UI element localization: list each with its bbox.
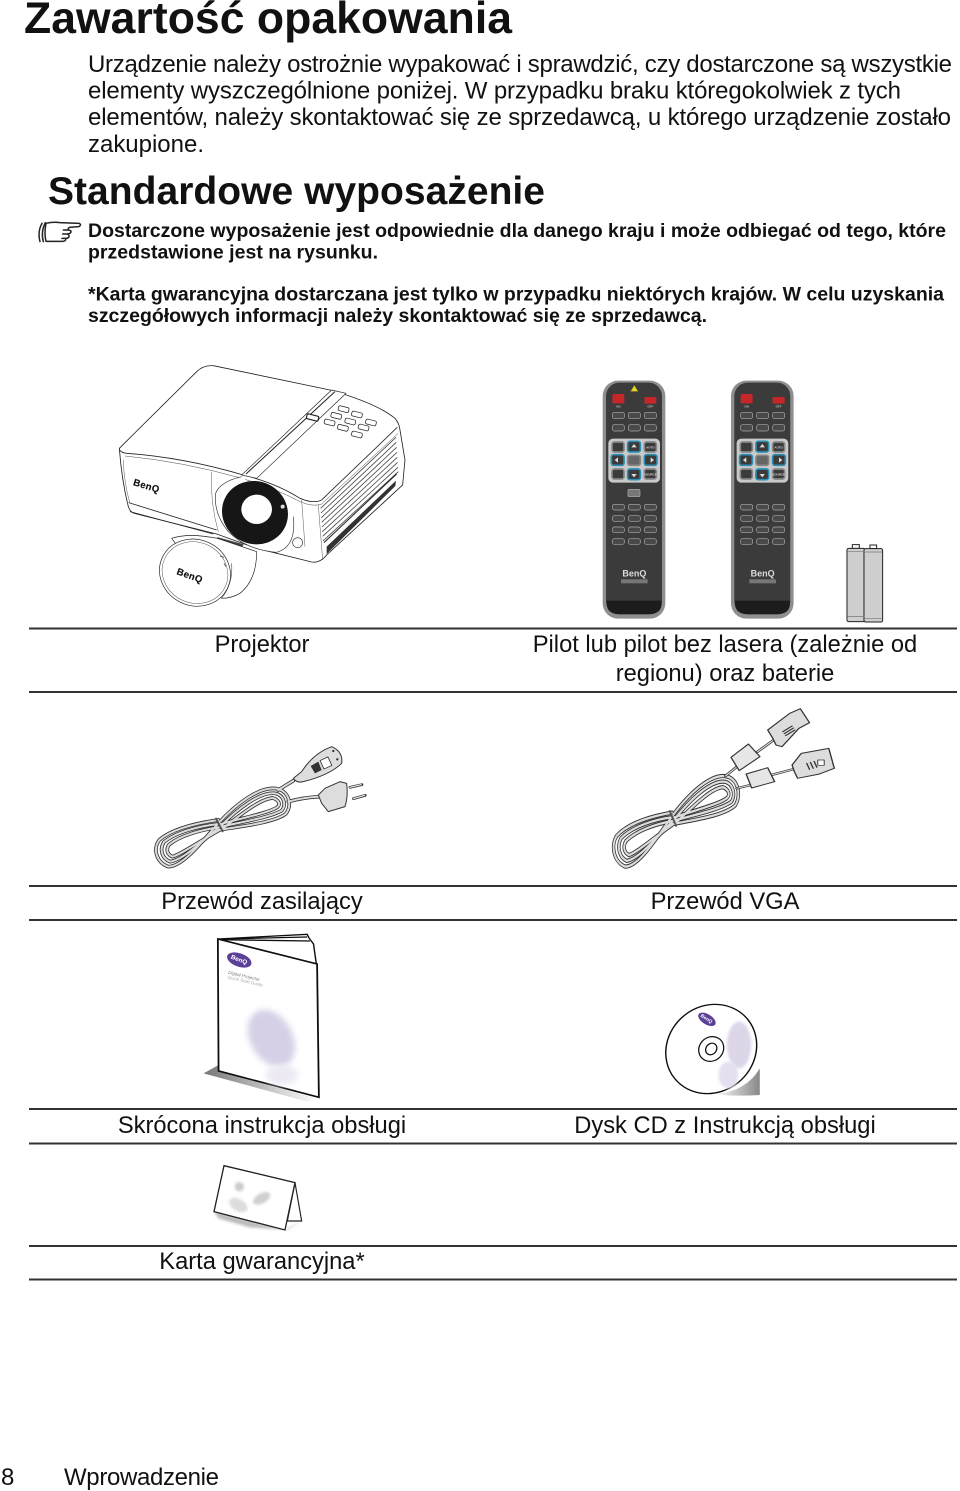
caption: remote and batteries: Pilot lub pilot bez lasera (zależnie od: [533, 632, 917, 658]
illustration: remote control without laser: SOURCE: [772, 472, 785, 476]
icon: pointing hand: [39, 222, 81, 242]
ferrite 2: [746, 768, 775, 788]
illustration: projector with lens cap: [119, 366, 405, 618]
caption row divider 1 top: [29, 628, 957, 630]
illustration: remote control with laser: OFF: [647, 405, 653, 409]
caption row divider 4 top: [29, 1245, 957, 1247]
side vents: [321, 437, 398, 541]
caption row divider 3 top: [29, 1108, 957, 1110]
connector 1: [768, 709, 810, 747]
note text block: [88, 220, 946, 327]
connector 2: [792, 748, 834, 778]
illustration: quick start guide booklet: Digital Projector: [228, 970, 261, 982]
illustration: remote control with laser: [603, 381, 665, 619]
illustration: remote control without laser: AUTO: [774, 445, 784, 449]
note text block: przedstawione jest na rysunku.: [88, 242, 378, 264]
caption: remote and batteries: regionu) oraz baterie: [616, 661, 834, 687]
illustration: remote control without laser: OFF: [776, 405, 782, 409]
intro text block: elementy wyszczególnione poniżej. W przypadku braku któregokolwiek z tych: [88, 78, 901, 104]
illustration: quick start guide booklet: Quick Start Guide: [227, 975, 264, 988]
control buttons: [306, 405, 377, 438]
illustration: remote control with laser: ON: [616, 405, 621, 409]
illustration: remote control without laser: [731, 381, 794, 619]
logo on lens cap: BenQ: [175, 566, 204, 586]
top panel strip: [242, 390, 346, 478]
illustration: remote control without laser: BenQ: [751, 569, 775, 579]
illustration: CD with user manual: BenQ: [699, 1013, 714, 1025]
note text block: *Karta gwarancyjna dostarczana jest tylko w przypadku niektórych krajów. W celu uzyskania: [88, 284, 944, 306]
caption: CD: Dysk CD z Instrukcją obsługi: [574, 1113, 876, 1139]
body silhouette: [119, 366, 405, 562]
illustration: quick start guide booklet: [204, 934, 319, 1102]
note text block: Dostarczone wyposażenie jest odpowiednie dla danego kraju i może odbiegać od tego, które: [88, 220, 946, 242]
caption: quick start guide: Skrócona instrukcja obsługi: [118, 1113, 406, 1139]
illustration: quick start guide booklet: BenQ: [230, 954, 248, 966]
lens surround: [215, 477, 294, 552]
illustration: VGA cable: [614, 709, 834, 867]
caption: power cable: Przewód zasilający: [161, 889, 363, 915]
caption: VGA cable: Przewód VGA: [651, 889, 800, 915]
lens cap: [172, 535, 257, 598]
illustration: batteries: [847, 545, 883, 622]
heading: standard accessories: Standardowe wyposażenie: [48, 170, 545, 213]
caption: remote and batteries: [533, 632, 917, 687]
focus slider: [217, 537, 243, 548]
illustration: remote control with laser: SOURCE: [644, 472, 657, 476]
illustration: remote control with laser: AUTO: [646, 445, 655, 449]
intro text block: [88, 51, 952, 158]
logo on projector: BenQ: [132, 477, 161, 496]
footer section name: Wprowadzenie: [64, 1464, 219, 1491]
wall plug: [318, 782, 347, 812]
top front edge: [119, 427, 397, 502]
note text block: szczegółowych informacji należy skontaktować się ze sprzedawcą.: [88, 305, 707, 327]
lens: [212, 470, 298, 555]
illustration: remote control with laser: BenQ: [622, 569, 646, 579]
intro text block: Urządzenie należy ostrożnie wypakować i sprawdzić, czy dostarczone są wszystkie: [88, 51, 952, 78]
footer page number: 8: [1, 1464, 14, 1491]
caption row divider 2 top: [29, 885, 957, 887]
intro text block: zakupione.: [88, 131, 204, 158]
caption: projector: Projektor: [215, 632, 309, 658]
IEC connector: [293, 747, 342, 782]
intro text block: elementów, należy skontaktować się ze sprzedawcą, u którego urządzenie zostało: [88, 104, 951, 131]
illustration: remote control without laser: ON: [744, 405, 749, 409]
ferrite 1: [731, 744, 760, 771]
illustration: CD with user manual: [648, 989, 774, 1109]
caption: warranty card: Karta gwarancyjna*: [159, 1249, 365, 1275]
illustration: power cable: [156, 747, 365, 867]
illustration: warranty card: [214, 1166, 302, 1230]
